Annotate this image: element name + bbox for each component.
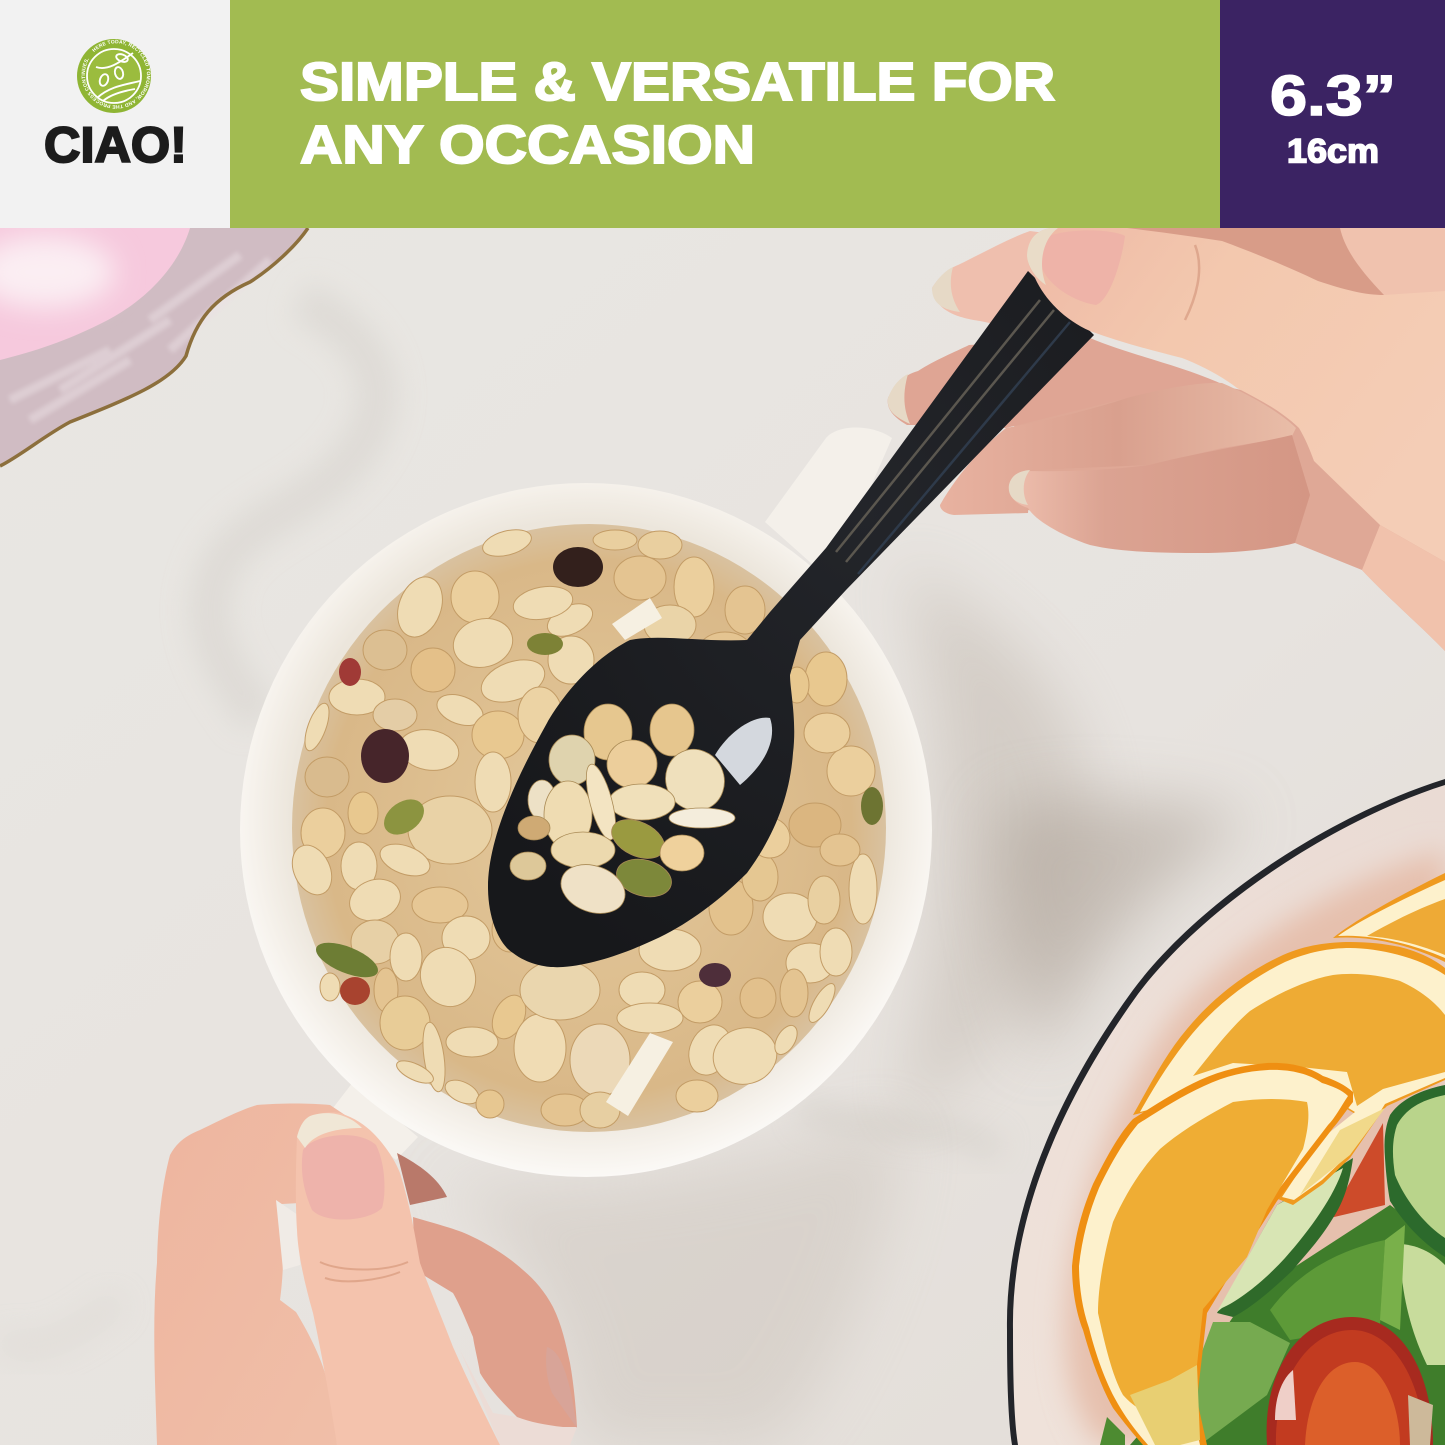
thumb nail bbox=[1040, 230, 1125, 305]
fingernails bbox=[932, 267, 960, 312]
little finger bbox=[1009, 435, 1310, 553]
palm base bbox=[1000, 340, 1445, 651]
glass dish, top left bbox=[0, 228, 308, 466]
cherry tomato wedge behind bbox=[1330, 1123, 1385, 1218]
lettuce bbox=[1100, 1205, 1445, 1445]
white handle gap bbox=[276, 1200, 300, 1270]
title bbox=[300, 52, 1055, 175]
pink shading inside bowl bbox=[1066, 850, 1445, 1445]
thumb bbox=[296, 1112, 500, 1445]
small fingertip under mug bbox=[397, 1153, 447, 1205]
hand holding mug, bottom left bbox=[154, 1104, 577, 1445]
title: ANY OCCASION bbox=[300, 115, 755, 175]
spoon handle ridges bbox=[836, 300, 1070, 574]
logo badge: HERE TODAY, RECYCLED TOMORROW, AND THE PROCESS CONTINUES. bbox=[81, 40, 150, 109]
title panel bbox=[230, 0, 1220, 228]
far orange slice bbox=[1333, 873, 1445, 962]
salad bowl, bottom right bbox=[1007, 779, 1445, 1445]
bowl interior bbox=[1013, 785, 1445, 1445]
granola on spoon bbox=[510, 704, 735, 922]
thumb nail bbox=[302, 1135, 384, 1220]
palm heel bbox=[1362, 525, 1445, 651]
index finger bbox=[932, 231, 1100, 340]
soft shadows on table bbox=[900, 560, 1091, 1120]
middle finger bbox=[888, 338, 1222, 428]
size callout bbox=[1270, 64, 1396, 170]
ring finger bbox=[940, 383, 1296, 515]
logo panel bbox=[0, 0, 230, 228]
top banner bbox=[0, 0, 1445, 228]
size panel bbox=[1220, 0, 1445, 228]
tomato half bbox=[1267, 1317, 1433, 1445]
white mug bbox=[240, 483, 932, 1177]
hand holding spoon: fingers behind the handle bbox=[888, 228, 1445, 651]
upper right finger bbox=[1340, 228, 1445, 300]
coconut shavings bbox=[606, 598, 673, 1116]
thumb crease bbox=[1185, 245, 1199, 320]
size callout: 16cm bbox=[1287, 132, 1379, 170]
spoon highlight bbox=[715, 718, 772, 785]
front orange slice bbox=[1072, 1063, 1353, 1445]
mug handle, bottom left bbox=[333, 1082, 418, 1160]
size callout: 6.3” bbox=[1270, 64, 1396, 128]
mug handle, top right bbox=[765, 428, 892, 580]
middle orange slice bbox=[1133, 942, 1445, 1205]
logo wordmark: CIAO! bbox=[44, 117, 187, 173]
thumb over spoon handle bbox=[1027, 228, 1445, 651]
right finger bbox=[413, 1217, 577, 1427]
knuckles behind thumb bbox=[1100, 228, 1445, 330]
back of hand bbox=[154, 1104, 345, 1445]
bowl rim bbox=[1007, 779, 1445, 1445]
granola filling bbox=[285, 525, 883, 1128]
dark seeds and raisins bbox=[312, 547, 883, 1005]
right cucumber slice bbox=[1385, 1085, 1445, 1257]
right fingernail bbox=[546, 1347, 577, 1428]
gap behind fingers bbox=[460, 1350, 577, 1445]
front cucumber slice bbox=[1217, 1158, 1353, 1317]
title: SIMPLE & VERSATILE FOR bbox=[300, 52, 1055, 112]
black spoon bbox=[488, 271, 1094, 967]
